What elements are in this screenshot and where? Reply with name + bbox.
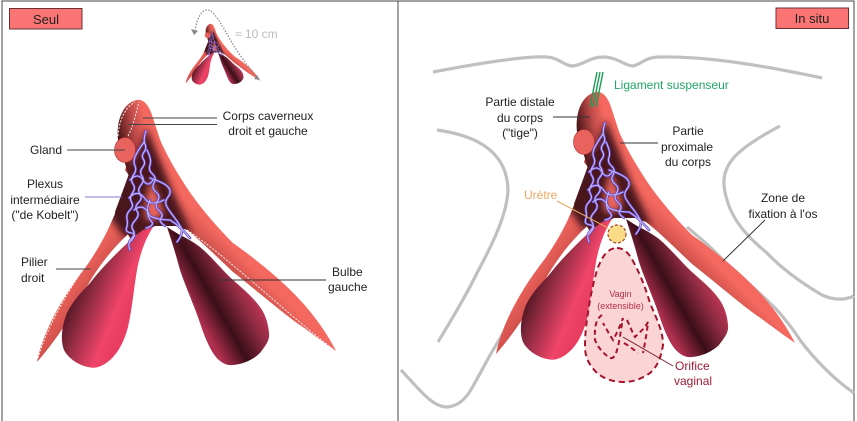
callout: zone de fixation: fixation à l'os bbox=[748, 207, 818, 221]
callout: ligament suspenseur bbox=[590, 72, 729, 107]
callout: orifice vaginal bbox=[623, 337, 712, 388]
callout: partie proximale: Partie bbox=[672, 124, 704, 138]
icon: miniature with length arrow bbox=[186, 10, 278, 85]
illustration: clitoris in situ bbox=[496, 92, 795, 360]
callout: orifice vaginal: vaginal bbox=[674, 374, 712, 388]
callout: pilier droit: Pilier bbox=[21, 255, 48, 269]
illustration: clitoris alone bbox=[37, 100, 336, 368]
callout: plexus bbox=[10, 177, 122, 222]
callout: partie proximale: proximale bbox=[661, 140, 713, 154]
vagina: Vagin bbox=[609, 289, 632, 299]
label: Seul bbox=[10, 8, 82, 29]
vagina: (extensible) bbox=[597, 301, 644, 311]
callout: partie distale: ("tige") bbox=[502, 126, 538, 140]
callout: plexus: intermédiaire bbox=[10, 193, 80, 207]
callout: partie distale bbox=[485, 95, 590, 140]
callout: partie proximale: du corps bbox=[665, 155, 711, 169]
callout: pilier droit: droit bbox=[21, 271, 45, 285]
callout: urètre bbox=[524, 188, 608, 228]
callout: ligament suspenseur: Ligament suspenseur bbox=[614, 78, 729, 92]
callout: zone de fixation bbox=[723, 191, 818, 261]
bones outline bbox=[401, 57, 854, 407]
vagina bbox=[585, 248, 663, 382]
urethra bbox=[608, 225, 626, 243]
callout: bulbe gauche: gauche bbox=[328, 280, 368, 294]
callout: corps caverneux bbox=[128, 109, 313, 138]
callout: bulbe gauche: Bulbe bbox=[332, 265, 363, 279]
callout: bulbe gauche bbox=[219, 265, 368, 294]
label: Seul: Seul bbox=[33, 12, 59, 27]
callout: zone de fixation: Zone de bbox=[761, 191, 805, 205]
callout: urètre: Urètre bbox=[524, 188, 558, 202]
callout: corps caverneux: Corps caverneux bbox=[223, 109, 313, 123]
callout: partie distale: du corps bbox=[497, 111, 543, 125]
label: In situ: In situ bbox=[795, 11, 829, 26]
callout: gland bbox=[30, 143, 125, 157]
panel: in situ bbox=[398, 1, 854, 421]
icon: miniature with length arrow: ≈ 10 cm bbox=[235, 27, 278, 41]
callout: plexus: Plexus bbox=[27, 177, 63, 191]
callout: orifice vaginal: Orifice bbox=[675, 359, 710, 373]
callout: gland: Gland bbox=[30, 143, 62, 157]
panel: seul bbox=[2, 1, 398, 421]
callout: pilier droit bbox=[21, 255, 91, 285]
callout: plexus: ("de Kobelt") bbox=[11, 208, 79, 222]
callout: partie distale: Partie distale bbox=[485, 95, 555, 109]
callout: corps caverneux: droit et gauche bbox=[228, 124, 308, 138]
callout: partie proximale bbox=[620, 124, 713, 169]
label: In situ bbox=[776, 8, 848, 28]
